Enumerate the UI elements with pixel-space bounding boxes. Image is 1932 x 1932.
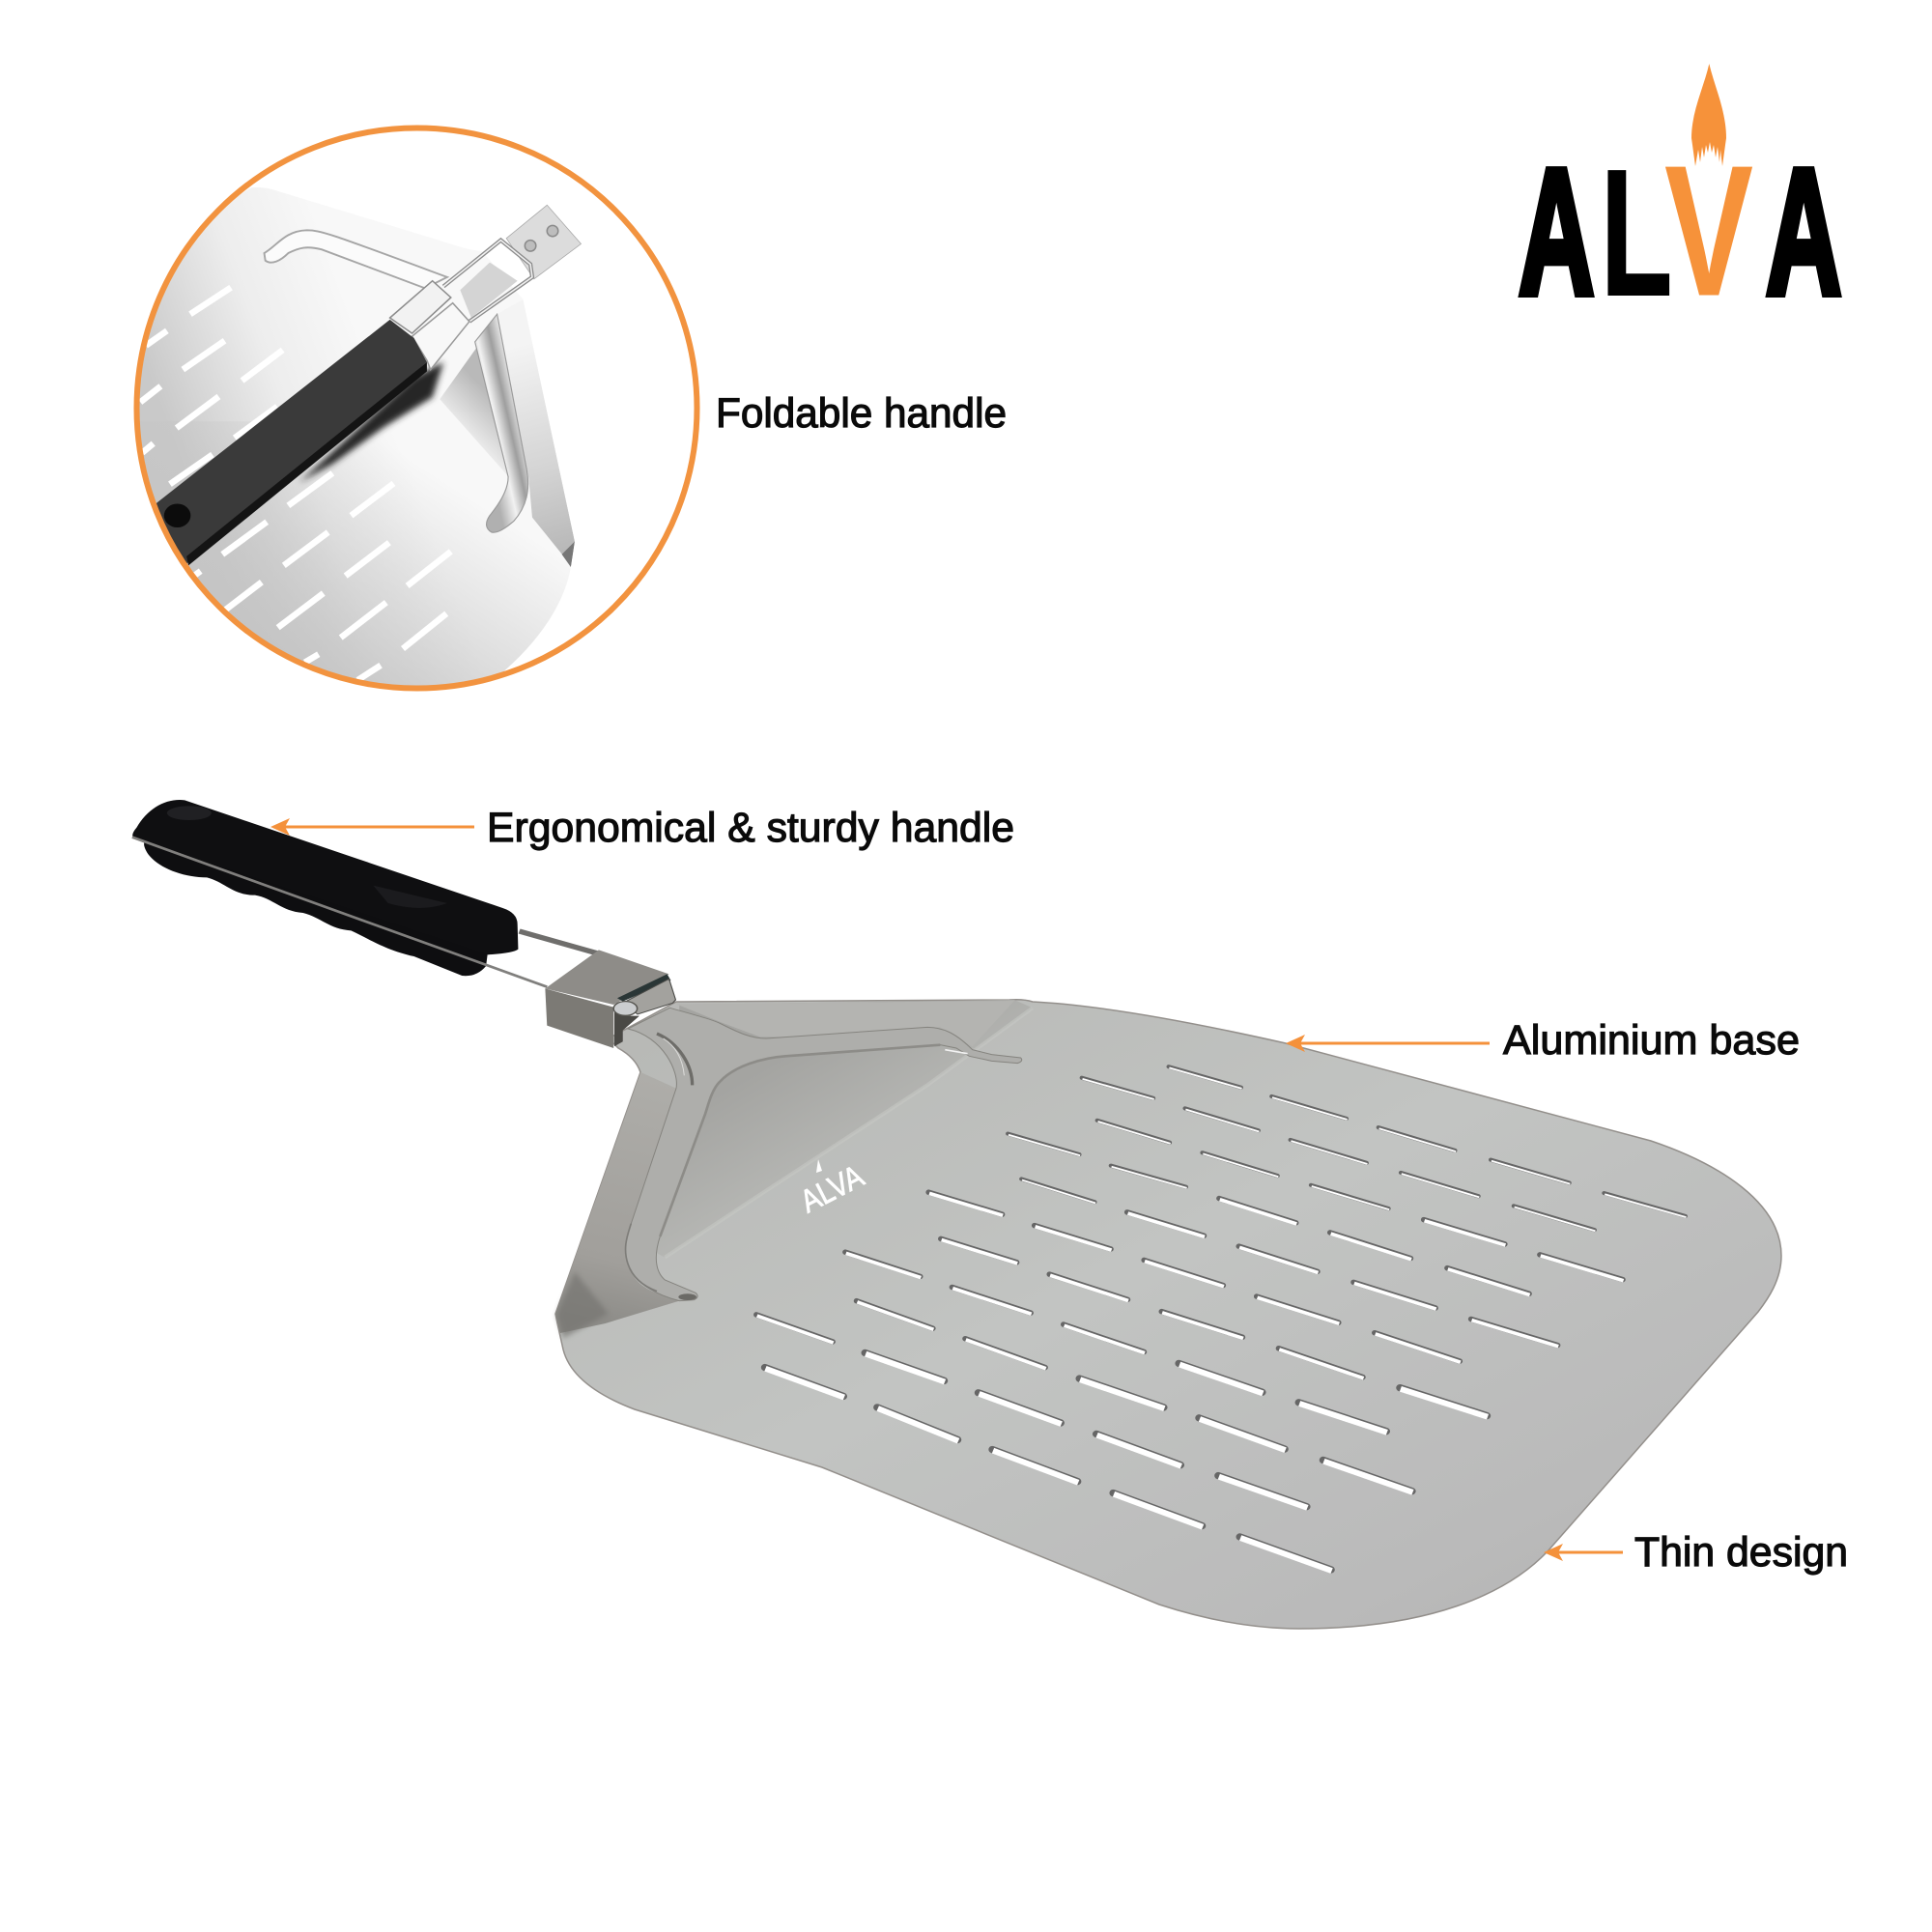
logo letter V: V xyxy=(1664,127,1753,335)
inset handle glare xyxy=(237,371,332,440)
handle lower grip xyxy=(144,836,488,976)
logo: ALVA flame wordmark xyxy=(1519,64,1841,335)
inset bracket top arm xyxy=(265,230,447,288)
handle moulded hollow xyxy=(373,886,447,908)
bracket crease highlight xyxy=(664,1038,684,1075)
inset plate holes xyxy=(525,225,558,251)
bracket tip xyxy=(678,1293,696,1300)
engraved logo flame xyxy=(816,1159,822,1173)
arrow: ergonomical handle xyxy=(270,818,474,836)
peel blade xyxy=(555,1000,1781,1629)
inset photo contents xyxy=(139,187,582,686)
inset slots xyxy=(140,288,451,680)
label: foldable handle: Foldable handle xyxy=(716,390,1007,437)
inset clip barrel xyxy=(460,263,518,318)
flange dark corner xyxy=(556,1272,609,1338)
inset peel base xyxy=(139,187,406,622)
hinge barrel xyxy=(623,979,675,1014)
y-shaped bracket xyxy=(626,1008,1022,1301)
inset orange ring xyxy=(137,128,697,688)
inset black handle xyxy=(148,320,427,569)
logo letter A second: A xyxy=(1766,132,1841,332)
logo flame xyxy=(1691,64,1726,166)
arrow: thin design xyxy=(1544,1544,1623,1561)
inset handle lower band xyxy=(186,362,427,565)
inset metal sleeve lower xyxy=(412,303,469,370)
fold highlight line xyxy=(665,1008,1033,1258)
left slots dark edge xyxy=(756,1078,1223,1526)
left slots xyxy=(756,1078,1224,1527)
handle hole xyxy=(167,806,212,820)
block front xyxy=(545,988,613,1048)
label: thin design: Thin design xyxy=(1634,1529,1848,1576)
inset peel surface xyxy=(139,187,575,686)
inset metal sleeve upper xyxy=(390,281,451,333)
hinge inner dark xyxy=(614,1008,639,1046)
left flange xyxy=(555,1072,679,1333)
top flange xyxy=(676,1001,1014,1046)
right slots white opening xyxy=(1162,1067,1687,1571)
logo letter L: L xyxy=(1601,133,1672,333)
peel neck and bracket details xyxy=(555,1000,1033,1338)
fold shaded area xyxy=(625,1000,1033,1258)
inset flange dark tip xyxy=(562,542,575,567)
right slots dark edge xyxy=(1161,1066,1686,1570)
bracket left-arm edge xyxy=(626,1224,657,1292)
block top xyxy=(545,950,669,1005)
inset wire frame highlight xyxy=(443,241,532,322)
product: pizza peel xyxy=(132,800,1781,1629)
inset fold wedge xyxy=(440,348,507,475)
metal strip xyxy=(132,838,547,987)
label: aluminium base: Aluminium base xyxy=(1503,1017,1800,1064)
logo letter A: A xyxy=(1519,132,1594,332)
arrow: aluminium base xyxy=(1286,1035,1490,1052)
inset flange right xyxy=(508,357,575,564)
inset hinge plate xyxy=(506,205,581,279)
right slots xyxy=(1161,1066,1687,1571)
panel: foldable handle inset circle xyxy=(107,128,697,717)
engraved logo on peel xyxy=(794,1157,869,1219)
upper rod xyxy=(520,931,599,953)
inset wire frame xyxy=(443,241,532,322)
rivet xyxy=(613,1002,638,1015)
bracket dark crease xyxy=(657,1034,693,1085)
bracket inner shade xyxy=(660,1045,940,1236)
inset handle hole xyxy=(164,504,190,527)
peel handle assembly xyxy=(132,800,675,1048)
hinge dark strip xyxy=(617,974,670,1002)
engraved logo text: ALVA xyxy=(794,1157,869,1219)
bright slit xyxy=(945,1050,968,1054)
left slots white opening xyxy=(757,1079,1224,1527)
handle upper grip xyxy=(132,800,518,954)
inset handle shadow xyxy=(299,362,443,482)
inset bracket right arm xyxy=(475,314,528,532)
inset peel lower shade xyxy=(237,465,558,686)
label: ergonomical handle: Ergonomical & sturdy handle xyxy=(487,805,1014,851)
